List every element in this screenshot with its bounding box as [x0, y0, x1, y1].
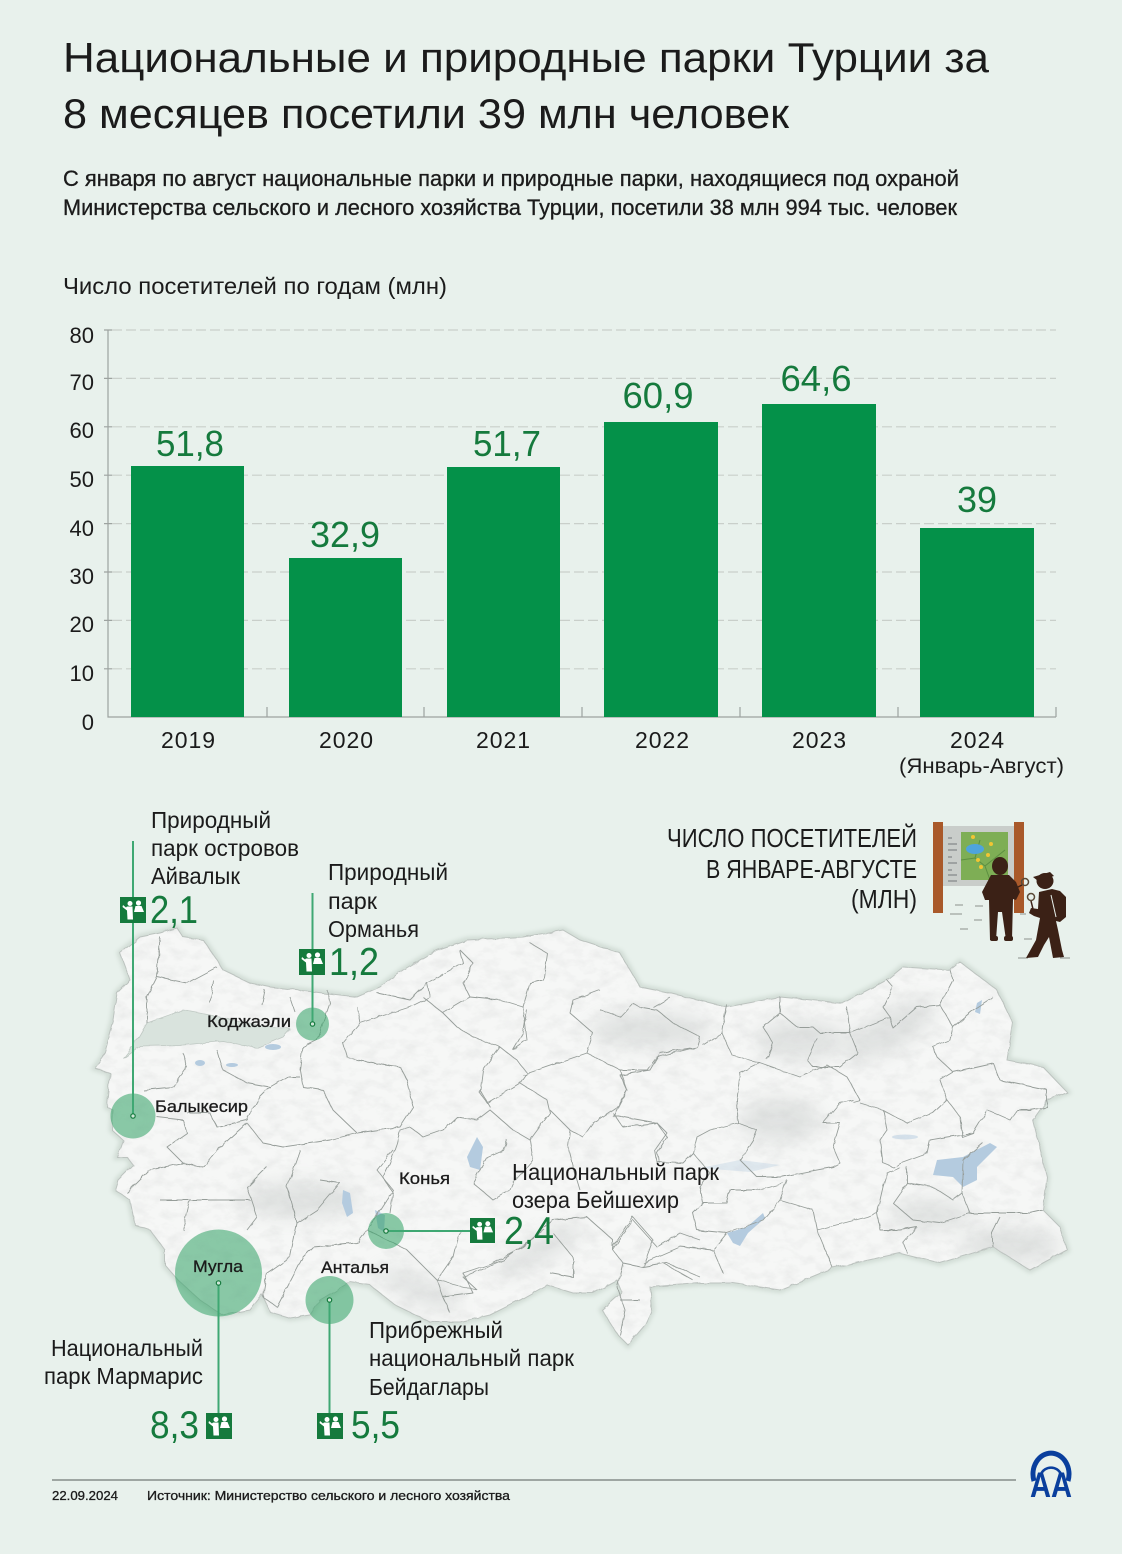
callout: Beydaglari: 5,5: [351, 1404, 400, 1447]
callout: Beysehir: озера Бейшехир: [512, 1187, 679, 1213]
x axis labels: 2022: [635, 727, 689, 753]
province borders: [127, 937, 1047, 1335]
callout: Ormanya: парк: [328, 888, 378, 914]
footer date and source: 22.09.2024: [52, 1489, 118, 1503]
bar values: 64,6: [780, 358, 852, 399]
subtitle text: [63, 166, 959, 220]
callout: Ormanya: Природный: [328, 859, 448, 885]
chart heading: Число посетителей по годам (млн): [63, 273, 447, 299]
y axis labels: 20: [70, 612, 94, 637]
province labels: Анталья: [321, 1258, 389, 1277]
callout: Beydaglari: Прибрежный: [369, 1317, 503, 1343]
callout: Marmaris: [44, 1335, 232, 1447]
logo: AA: AA: [1030, 1466, 1072, 1505]
bars: [131, 404, 1034, 717]
bar values: 51,8: [156, 423, 224, 464]
province labels: Коджаэли: [207, 1012, 291, 1031]
province labels: Мугла: [193, 1257, 244, 1276]
y axis labels: 40: [70, 516, 94, 541]
map legend heading: (МЛН): [851, 886, 917, 914]
province labels: Балыкесир: [155, 1097, 248, 1116]
x axis labels: [161, 727, 1064, 778]
province labels: [155, 1012, 450, 1277]
y axis labels: 60: [70, 418, 94, 443]
callout: Ormanya: [299, 859, 448, 984]
map marker circles: [110, 1008, 404, 1324]
map legend heading: [667, 823, 917, 914]
relief shading: [240, 988, 1060, 1320]
y axis labels: 70: [70, 370, 94, 395]
callout: Ayvalik: Природный: [151, 807, 271, 833]
bar chart: visitors by year: [70, 323, 1064, 778]
y axis labels: 80: [70, 323, 94, 348]
callout: Ayvalik: парк островов: [151, 835, 299, 861]
bar values: 32,9: [310, 514, 380, 555]
subtitle text: С января по август национальные парки и природные парки, находящиеся под охраной: [63, 166, 959, 191]
marker dots: [131, 1022, 388, 1302]
callout: Marmaris: Национальный: [51, 1335, 203, 1361]
x axis labels: 2023: [792, 727, 846, 753]
callout: Ayvalik: Айвалык: [151, 863, 241, 889]
footer rule: [52, 1479, 1016, 1481]
lakes: [195, 1000, 997, 1246]
subtitle text: Министерства сельского и лесного хозяйства Турции, посетили 38 млн 994 тыс. человек: [63, 195, 957, 220]
leader lines: [133, 841, 470, 1413]
callout: Beysehir: 2,4: [504, 1210, 554, 1253]
map legend heading: ЧИСЛО ПОСЕТИТЕЛЕЙ: [667, 823, 917, 853]
y axis labels: 10: [70, 661, 94, 686]
province labels: Конья: [399, 1169, 450, 1188]
coastal halo: [95, 928, 1067, 1345]
y axis labels: 50: [70, 467, 94, 492]
icon: visitors at park map board: [933, 822, 1070, 958]
footer date and source: Источник: Министерство сельского и лесного хозяйства: [147, 1489, 510, 1503]
land: [95, 928, 1067, 1345]
x axis labels: 2024: [950, 727, 1004, 753]
x axis labels: 2021: [476, 727, 530, 753]
callout: Marmaris: парк Мармарис: [44, 1363, 203, 1389]
callout: Ayvalik: [120, 807, 299, 932]
callout: Ormanya: Орманья: [328, 916, 419, 942]
Sea of Marmara: [123, 1010, 290, 1058]
bar values: [156, 358, 997, 555]
map of Turkey: [90, 920, 1080, 1350]
callout: Beydaglari: [317, 1317, 575, 1447]
callout: Beydaglari: национальный парк: [369, 1345, 575, 1371]
y axis labels: 0: [82, 710, 94, 735]
bar values: 39: [957, 479, 997, 520]
y axis labels: [70, 323, 94, 735]
callout: Beysehir: Национальный парк: [512, 1159, 720, 1185]
callout: Marmaris: 8,3: [150, 1404, 199, 1447]
title: [63, 34, 990, 137]
x axis labels: 2019: [161, 727, 215, 753]
x axis labels: 2020: [319, 727, 373, 753]
bar values: 60,9: [622, 375, 694, 416]
title: Национальные и природные парки Турции за: [63, 34, 990, 81]
callout: Ayvalik: 2,1: [150, 889, 198, 932]
callout: Ormanya: 1,2: [329, 941, 379, 984]
bar values: 51,7: [473, 423, 541, 464]
logo: AA: [1030, 1453, 1072, 1505]
callout: Beysehir: [470, 1159, 720, 1253]
y axis labels: 30: [70, 564, 94, 589]
callout: Beydaglari: Бейдаглары: [369, 1374, 489, 1400]
x axis labels: (Январь-Август): [899, 755, 1064, 778]
map legend heading: В ЯНВАРЕ-АВГУСТЕ: [706, 856, 917, 884]
title: 8 месяцев посетили 39 млн человек: [63, 90, 790, 137]
